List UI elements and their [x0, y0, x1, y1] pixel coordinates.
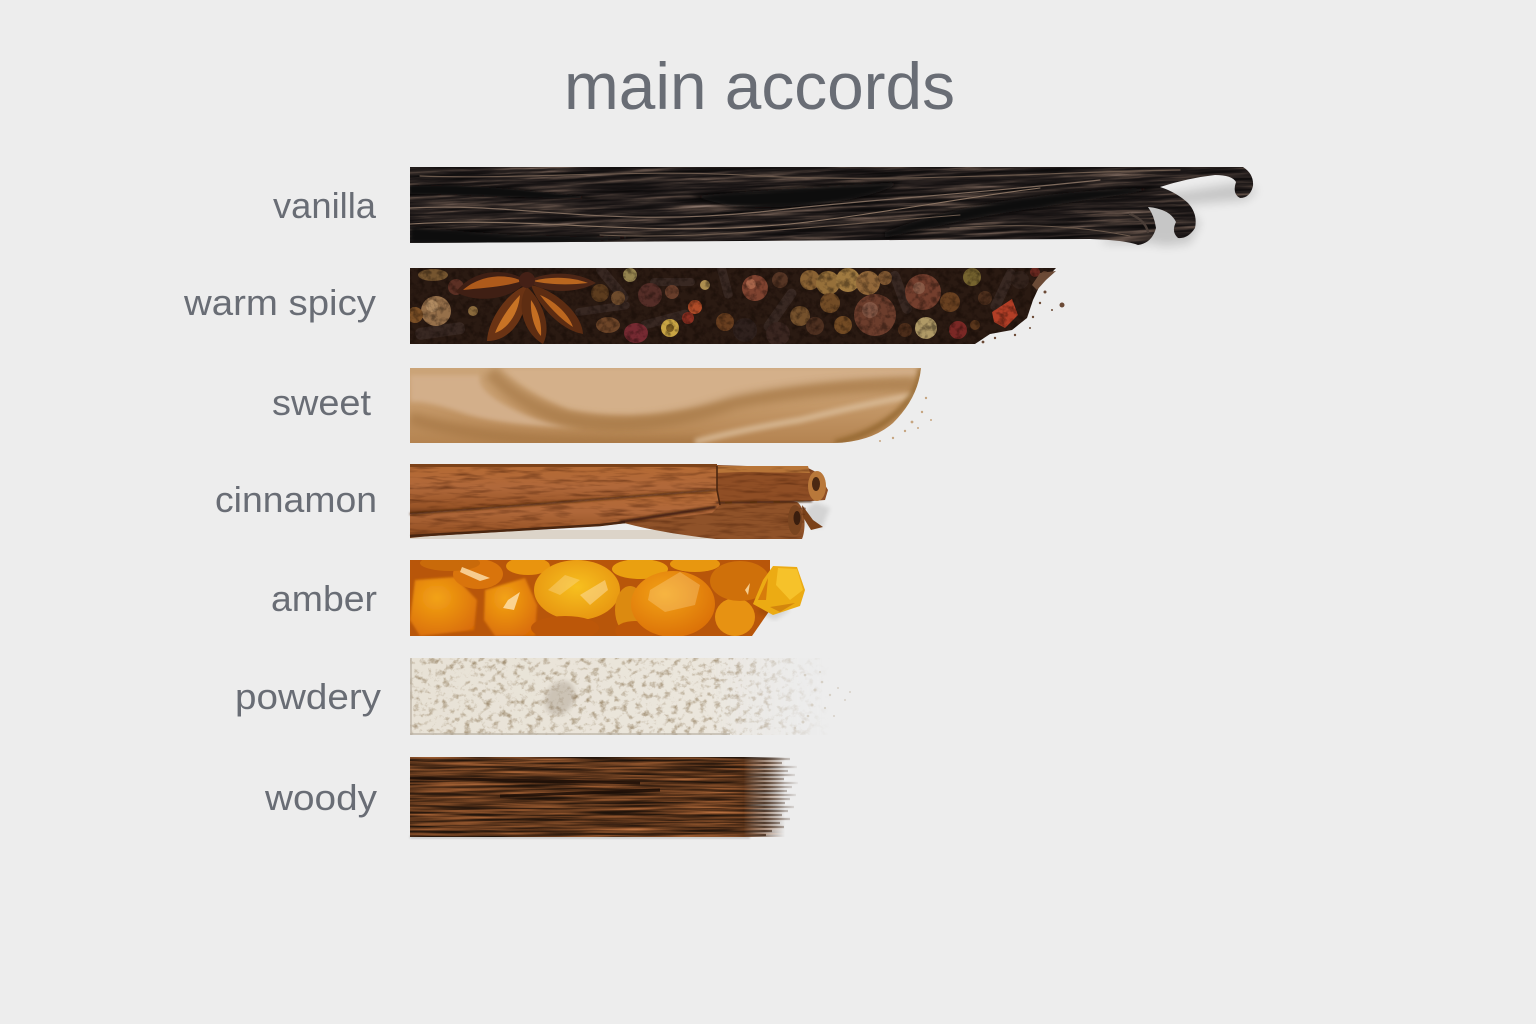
- cream splatter: [879, 397, 932, 442]
- bar: sweet cream swirl: [410, 368, 932, 444]
- row: woody: [264, 757, 798, 839]
- bar: mixed spices: [410, 268, 1064, 344]
- bar: amber resin: [410, 560, 805, 636]
- row: sweet: [272, 368, 932, 444]
- label: cinnamon: cinnamon: [215, 479, 377, 520]
- bar: vanilla beans: [410, 167, 1256, 250]
- row: cinnamon: [215, 464, 830, 539]
- label: vanilla: vanilla: [273, 185, 377, 226]
- main accords bar chart: [184, 61, 1256, 840]
- frayed wood ends: [735, 759, 798, 835]
- title: main accords: [564, 49, 955, 123]
- star anise: [456, 272, 596, 344]
- label: powdery: powdery: [235, 676, 381, 717]
- bar: dark wood grain: [410, 757, 798, 839]
- label: sweet: sweet: [272, 382, 371, 423]
- back lower stick: [620, 499, 805, 539]
- front sticks: [410, 490, 720, 538]
- row: warm spicy: [184, 268, 1064, 344]
- spice debris: [982, 271, 1064, 343]
- label: warm spicy: warm spicy: [183, 282, 376, 323]
- back upper stick: [716, 465, 828, 503]
- label: woody: woody: [264, 777, 377, 818]
- bar: cinnamon sticks: [410, 464, 830, 539]
- row: powdery: [235, 658, 851, 735]
- powder scatter: [794, 671, 851, 729]
- bean shadow bands: [410, 182, 1160, 245]
- amber highlights: [460, 567, 750, 612]
- bar: white powder: [410, 658, 851, 735]
- row: amber: [272, 560, 805, 636]
- row: vanilla: [273, 167, 1256, 250]
- label: amber: amber: [271, 578, 377, 619]
- loose amber crystal: [753, 566, 805, 620]
